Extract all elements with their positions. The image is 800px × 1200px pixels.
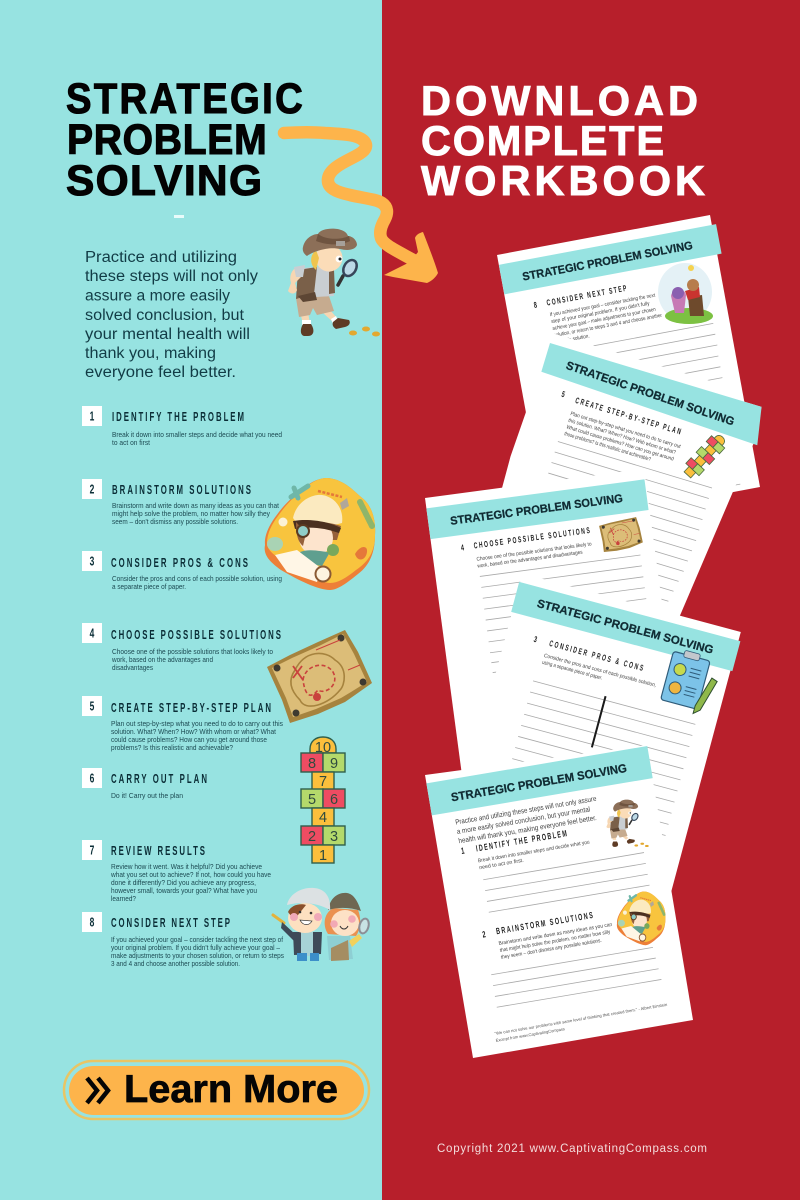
step 1: IDENTIFY THE PROBLEM <box>112 410 244 425</box>
step 3: Consider the pros and cons of each possible solution, using <box>112 574 282 583</box>
panel: worksheet step 5: What could cause problems? How can you get around <box>565 424 674 463</box>
panel: worksheet step 8 <box>497 215 764 527</box>
step 5: Plan out step-by-step what you need to do to carry out this <box>111 719 283 728</box>
icon: inventor boy on yellow blob <box>265 478 375 590</box>
step 7: Review how it went. Was it helpful? Did you achieve <box>111 862 262 871</box>
step 5 <box>82 696 283 752</box>
step 3: a separate piece of paper. <box>112 582 186 591</box>
icon: small explorer <box>606 800 649 847</box>
icon: hopscotch: 6 <box>330 792 338 808</box>
step 6 <box>82 768 207 800</box>
icon: two kids exploring <box>273 888 370 961</box>
panel: worksheet step 3: 3 <box>533 635 538 645</box>
intro paragraph: Practice and utilizing <box>85 249 237 266</box>
panel: worksheet step 4: Choose one of the possible solutions that looks likely to <box>476 541 592 563</box>
panel: worksheet step 3 <box>447 573 743 910</box>
panel: worksheet step 1 and 2: IDENTIFY THE PROBLEM <box>475 828 568 854</box>
icon: hopscotch: 10 <box>315 740 331 756</box>
panel: worksheet step 5 <box>463 332 771 683</box>
title: strategic problem solving: STRATEGIC <box>66 74 303 122</box>
step 8: your original problem. If you didn't fully achieve your goal – <box>111 943 280 952</box>
icon: hopscotch: 4 <box>319 810 327 826</box>
icon: double chevron <box>87 1078 108 1103</box>
panel: worksheet step 1 and 2: that might help solve the problem, no matter how silly <box>499 929 611 954</box>
panel: worksheet step 4: CHOOSE POSSIBLE SOLUTIONS <box>473 527 591 551</box>
step 5: could cause problems? How can you get around those <box>111 735 267 744</box>
step 3 <box>82 551 282 591</box>
icon: treasure map <box>267 630 372 723</box>
step 4: disadvantages <box>112 663 153 672</box>
panel: worksheet step 1 and 2: 1 <box>460 845 465 856</box>
icon: explorer with magnifying glass <box>288 229 380 336</box>
panel: worksheet step 1 and 2: Brainstorm and write down as many ideas as you can <box>498 922 613 947</box>
step 2: seem – don't dismiss any possible solutions. <box>112 517 238 526</box>
step 1: to act on first <box>112 438 150 447</box>
panel: worksheet step 8: step of your original problem. If you didn't fully <box>551 301 650 325</box>
panel: worksheet step 1 and 2: need to act on first. <box>479 858 524 871</box>
step 7 <box>82 840 271 903</box>
step 5: CREATE STEP-BY-STEP PLAN <box>111 701 271 716</box>
vertical divider bar <box>592 696 606 747</box>
panel: worksheet step 1 and 2: health will thank you, making everyone feel better. <box>458 813 597 845</box>
step 7: 7 <box>90 844 94 858</box>
title: download complete workbook: COMPLETE <box>421 117 664 164</box>
title: strategic problem solving <box>66 74 303 205</box>
arrow: orange squiggle <box>284 132 438 283</box>
panel: worksheet step 5: this solution. What? When? How? With whom or what? <box>567 418 676 456</box>
panel: steps list <box>82 406 284 968</box>
step 3: CONSIDER PROS & CONS <box>111 556 248 571</box>
icon: kids on green hill <box>658 263 713 324</box>
icon: hopscotch: 3 <box>330 829 338 845</box>
panel: worksheet step 3: STRATEGIC PROBLEM SOLVING <box>536 598 715 657</box>
step 8: 8 <box>90 916 94 930</box>
intro paragraph <box>85 249 258 381</box>
panel: worksheet step 3: Consider the pros and cons of each possible solution, <box>543 653 657 689</box>
panel: worksheet step 4: STRATEGIC PROBLEM SOLVING <box>450 493 624 528</box>
step 2: Brainstorm and write down as many ideas as you can that <box>112 501 279 510</box>
panel: worksheet step 1 and 2: Break it down into smaller steps and decide what you <box>478 840 590 864</box>
panel: worksheet step 5: 5 <box>560 390 566 400</box>
panel: worksheet step 1 and 2: STRATEGIC PROBLEM SOLVING <box>450 761 628 804</box>
panel: worksheet step 8: If you achieved your goal – consider tackling the next <box>549 293 656 318</box>
step 7: done it differently? Did you achieve any progress, <box>111 878 256 887</box>
step 2: 2 <box>90 483 94 497</box>
panel: worksheet step 5: CREATE STEP-BY-STEP PLAN <box>574 397 682 437</box>
panel: worksheet step 1 and 2 <box>425 745 693 1058</box>
step 4: Choose one of the possible solutions that looks likely to <box>112 647 273 656</box>
panel: worksheet step 8: 8 <box>533 300 538 310</box>
step 2: might help solve the problem, no matter how silly they <box>112 509 270 518</box>
panel: right red background <box>382 0 800 1200</box>
button: learn more <box>64 1061 369 1119</box>
intro paragraph: thank you, making <box>85 345 216 362</box>
small white dash <box>174 215 184 218</box>
step 8: If you achieved your goal – consider tackling the next step of <box>111 935 283 944</box>
title: download complete workbook: DOWNLOAD <box>421 77 698 124</box>
panel: worksheet step 8: solution, or return to steps 3 and 4 and choose another <box>553 313 663 339</box>
panel: worksheet step 8: possible solution. <box>555 333 590 346</box>
intro paragraph: your mental health will <box>85 326 250 343</box>
step 7: however small, towards your goal? What have you <box>111 886 257 895</box>
icon: clipboard and pencil <box>659 647 723 717</box>
panel: worksheet step 1 and 2: a more easily solved conclusion, but your mental <box>456 804 591 836</box>
intro paragraph: these steps will not only <box>85 268 258 285</box>
title: strategic problem solving: PROBLEM <box>67 115 267 163</box>
step 7: learned? <box>111 894 136 903</box>
step 6: 6 <box>90 772 94 786</box>
icon: hopscotch: 5 <box>308 792 316 808</box>
icon: hopscotch <box>301 737 345 864</box>
icon: hopscotch: 9 <box>330 756 338 772</box>
panel: left teal background <box>0 0 382 1200</box>
panel: worksheet step 1 and 2: BRAINSTORM SOLUTIONS <box>495 910 594 937</box>
panel: worksheet step 1 and 2: "We can not solve our problems with same level of thinking that created them." - Albert Einstein <box>494 1002 668 1036</box>
panel: worksheet step 1 and 2: they seem – don't dismiss any possible solutions. <box>501 938 602 961</box>
step 5: 5 <box>90 700 94 714</box>
intro paragraph: solved conclusion, but <box>85 307 245 324</box>
step 1 <box>82 406 282 447</box>
title: strategic problem solving: SOLVING <box>66 158 262 205</box>
step 4: work, based on the advantages and <box>111 655 213 664</box>
icon: hopscotch: 8 <box>308 756 316 772</box>
panel: worksheet step 3: using a separate piece of paper. <box>541 660 603 682</box>
step 6: Do it! Carry out the plan <box>111 791 183 800</box>
step 2: BRAINSTORM SOLUTIONS <box>112 483 251 498</box>
step 6: CARRY OUT PLAN <box>111 772 207 787</box>
step 5: problems? Is this realistic and achievable? <box>111 743 233 752</box>
step 4 <box>82 623 281 672</box>
step 8 <box>82 912 284 968</box>
icon: hopscotch: 7 <box>319 774 327 790</box>
worksheet band <box>511 582 740 671</box>
worksheet band <box>426 479 649 539</box>
step 3: 3 <box>90 555 94 569</box>
panel: worksheet step 1 and 2: Excerpt from www.CaptivatingCompass <box>495 1026 565 1043</box>
step 5: solution. What? When? How? With whom or what? What <box>111 727 276 736</box>
step 1: 1 <box>90 410 94 424</box>
panel: worksheet step 3: CONSIDER PROS & CONS <box>548 640 644 673</box>
panel: worksheet step 5: STRATEGIC PROBLEM SOLVING <box>564 360 736 428</box>
button: learn more: Learn More <box>124 1068 338 1111</box>
worksheet band <box>426 746 653 815</box>
icon: small blob <box>617 891 665 945</box>
step 8: CONSIDER NEXT STEP <box>111 916 230 931</box>
worksheet band <box>539 343 768 445</box>
icon: small treasure map <box>594 510 648 560</box>
step 8: make adjustments to your chosen solution, or return to steps <box>111 951 284 960</box>
step 7: REVIEW RESULTS <box>111 844 205 859</box>
icon: small hopscotch <box>681 431 729 481</box>
icon: hopscotch: 2 <box>308 829 316 845</box>
panel: worksheet step 5: those problems? Is this realistic and achievable? <box>563 431 651 463</box>
intro paragraph: assure a more easily <box>85 288 230 304</box>
icon: hopscotch: 1 <box>319 848 327 864</box>
panel: worksheet step 1 and 2: Practice and utilizing these steps will not only assure <box>455 794 597 827</box>
intro paragraph: everyone feel better. <box>85 364 236 381</box>
step 4: CHOOSE POSSIBLE SOLUTIONS <box>111 628 281 643</box>
title: download complete workbook: WORKBOOK <box>421 157 705 204</box>
panel: worksheet step 4: 4 <box>460 543 465 553</box>
step 2 <box>82 479 279 526</box>
copyright: Copyright 2021 www.CaptivatingCompass.com <box>437 1143 707 1155</box>
step 7: what you set out to achieve? If not, how could you have <box>110 870 271 879</box>
worksheet band <box>499 224 722 294</box>
panel: worksheet step 4 <box>425 469 681 776</box>
panel: worksheet step 8: STRATEGIC PROBLEM SOLVING <box>522 240 694 284</box>
step 4: 4 <box>90 627 95 641</box>
panel: worksheet step 8: achieve your goal – make adjustments to your chosen <box>552 307 656 332</box>
step 1: Break it down into smaller steps and decide what you need <box>112 430 282 439</box>
title: download complete workbook <box>421 77 705 204</box>
panel: worksheet step 8: CONSIDER NEXT STEP <box>546 285 627 308</box>
panel: worksheet step 4: work, based on the advantages and disadvantages <box>477 550 583 570</box>
step 8: 3 and 4 and choose another possible solution. <box>111 959 240 968</box>
panel: worksheet step 5: Plan out step-by-step what you need to do to carry out <box>570 411 682 450</box>
panel: worksheet step 1 and 2: 2 <box>482 929 487 940</box>
